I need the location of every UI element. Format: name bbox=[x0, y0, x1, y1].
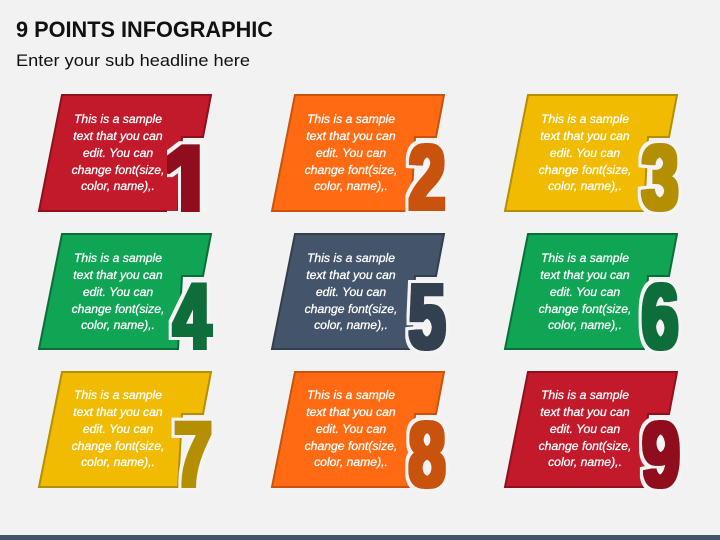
text block 7: change font(size, bbox=[72, 439, 164, 453]
number 3: 3 bbox=[642, 125, 678, 229]
text block 8: edit. You can bbox=[316, 422, 386, 436]
text block 8: text that you can bbox=[306, 405, 396, 419]
text block 2 bbox=[305, 112, 397, 193]
text block 4: color, name),. bbox=[81, 318, 155, 332]
panel shape 3 bbox=[505, 95, 677, 211]
text block 1: text that you can bbox=[73, 129, 163, 143]
panel: point 2 bbox=[272, 95, 445, 229]
text block 5: text that you can bbox=[306, 268, 396, 282]
text block 5: edit. You can bbox=[316, 285, 386, 299]
panel shape 1 bbox=[39, 95, 211, 211]
panel: point 5 bbox=[272, 234, 445, 368]
panel: point 6 bbox=[505, 234, 678, 368]
text block 3: change font(size, bbox=[539, 163, 631, 177]
panel shape 7 bbox=[39, 372, 211, 487]
text block 5: color, name),. bbox=[314, 318, 388, 332]
text block 6: text that you can bbox=[540, 268, 630, 282]
number 9: 9 bbox=[642, 404, 680, 506]
text block 2: This is a sample bbox=[307, 112, 395, 126]
text block 7: edit. You can bbox=[83, 422, 153, 436]
panel shape 5 bbox=[272, 234, 444, 349]
text block 6: color, name),. bbox=[548, 318, 622, 332]
number 7: 7 bbox=[174, 404, 212, 506]
text block 6: change font(size, bbox=[539, 302, 631, 316]
panel: point 9 bbox=[505, 372, 680, 506]
text block 3 bbox=[539, 112, 631, 193]
number 5: 5 bbox=[409, 264, 445, 368]
text block 9: This is a sample bbox=[541, 388, 629, 402]
text block 8: This is a sample bbox=[307, 388, 395, 402]
number 1: 1 bbox=[160, 121, 216, 254]
text block 3: color, name),. bbox=[548, 179, 622, 193]
text block 9: edit. You can bbox=[550, 422, 620, 436]
text block 5: change font(size, bbox=[305, 302, 397, 316]
footer bar bbox=[0, 535, 720, 540]
panel shape 4 bbox=[39, 234, 211, 349]
text block 7: This is a sample bbox=[74, 388, 162, 402]
text block 3: This is a sample bbox=[541, 112, 629, 126]
text block 6 bbox=[539, 251, 631, 332]
text block 9: change font(size, bbox=[539, 439, 631, 453]
panel: point 1 bbox=[38, 94, 212, 212]
panel: point 7 bbox=[39, 372, 212, 506]
text block 6: This is a sample bbox=[541, 251, 629, 265]
text block 4: This is a sample bbox=[74, 251, 162, 265]
panel shape 6 bbox=[505, 234, 677, 349]
text block 4: text that you can bbox=[73, 268, 163, 282]
panel: point 4 bbox=[39, 234, 211, 368]
text block 4: edit. You can bbox=[83, 285, 153, 299]
text block 8: change font(size, bbox=[305, 439, 397, 453]
text block 3: edit. You can bbox=[550, 146, 620, 160]
text block 2: text that you can bbox=[306, 129, 396, 143]
text block 5: This is a sample bbox=[307, 251, 395, 265]
panel shape 8 bbox=[272, 372, 444, 487]
panel shape 9 bbox=[505, 372, 677, 487]
title: 9 POINTS INFOGRAPHIC bbox=[16, 17, 273, 42]
text block 2: change font(size, bbox=[305, 163, 397, 177]
text block 7 bbox=[72, 388, 164, 469]
text block 8 bbox=[305, 388, 397, 469]
text block 9: text that you can bbox=[540, 405, 630, 419]
number 4: 4 bbox=[173, 266, 211, 368]
text block 1: This is a sample bbox=[74, 112, 162, 126]
text block 3: text that you can bbox=[540, 129, 630, 143]
text block 2: edit. You can bbox=[316, 146, 386, 160]
text block 1: edit. You can bbox=[83, 146, 153, 160]
text block 1: color, name),. bbox=[81, 179, 155, 193]
text block 1 bbox=[72, 112, 164, 193]
number 8: 8 bbox=[409, 402, 445, 506]
text block 2: color, name),. bbox=[314, 179, 388, 193]
text block 6: edit. You can bbox=[550, 285, 620, 299]
text block 4 bbox=[72, 251, 164, 332]
text block 7: color, name),. bbox=[81, 455, 155, 469]
number 6: 6 bbox=[642, 264, 678, 368]
text block 5 bbox=[305, 251, 397, 332]
panel shape 2 bbox=[272, 95, 444, 211]
panel: point 3 bbox=[505, 95, 678, 229]
text block 7: text that you can bbox=[73, 405, 163, 419]
text block 9: color, name),. bbox=[548, 455, 622, 469]
text block 4: change font(size, bbox=[72, 302, 164, 316]
text block 9 bbox=[539, 388, 631, 469]
text block 8: color, name),. bbox=[314, 455, 388, 469]
number 2: 2 bbox=[409, 125, 445, 229]
text block 1: change font(size, bbox=[72, 163, 164, 177]
sub headline: Enter your sub headline here bbox=[16, 51, 250, 70]
panel: point 8 bbox=[272, 372, 445, 506]
